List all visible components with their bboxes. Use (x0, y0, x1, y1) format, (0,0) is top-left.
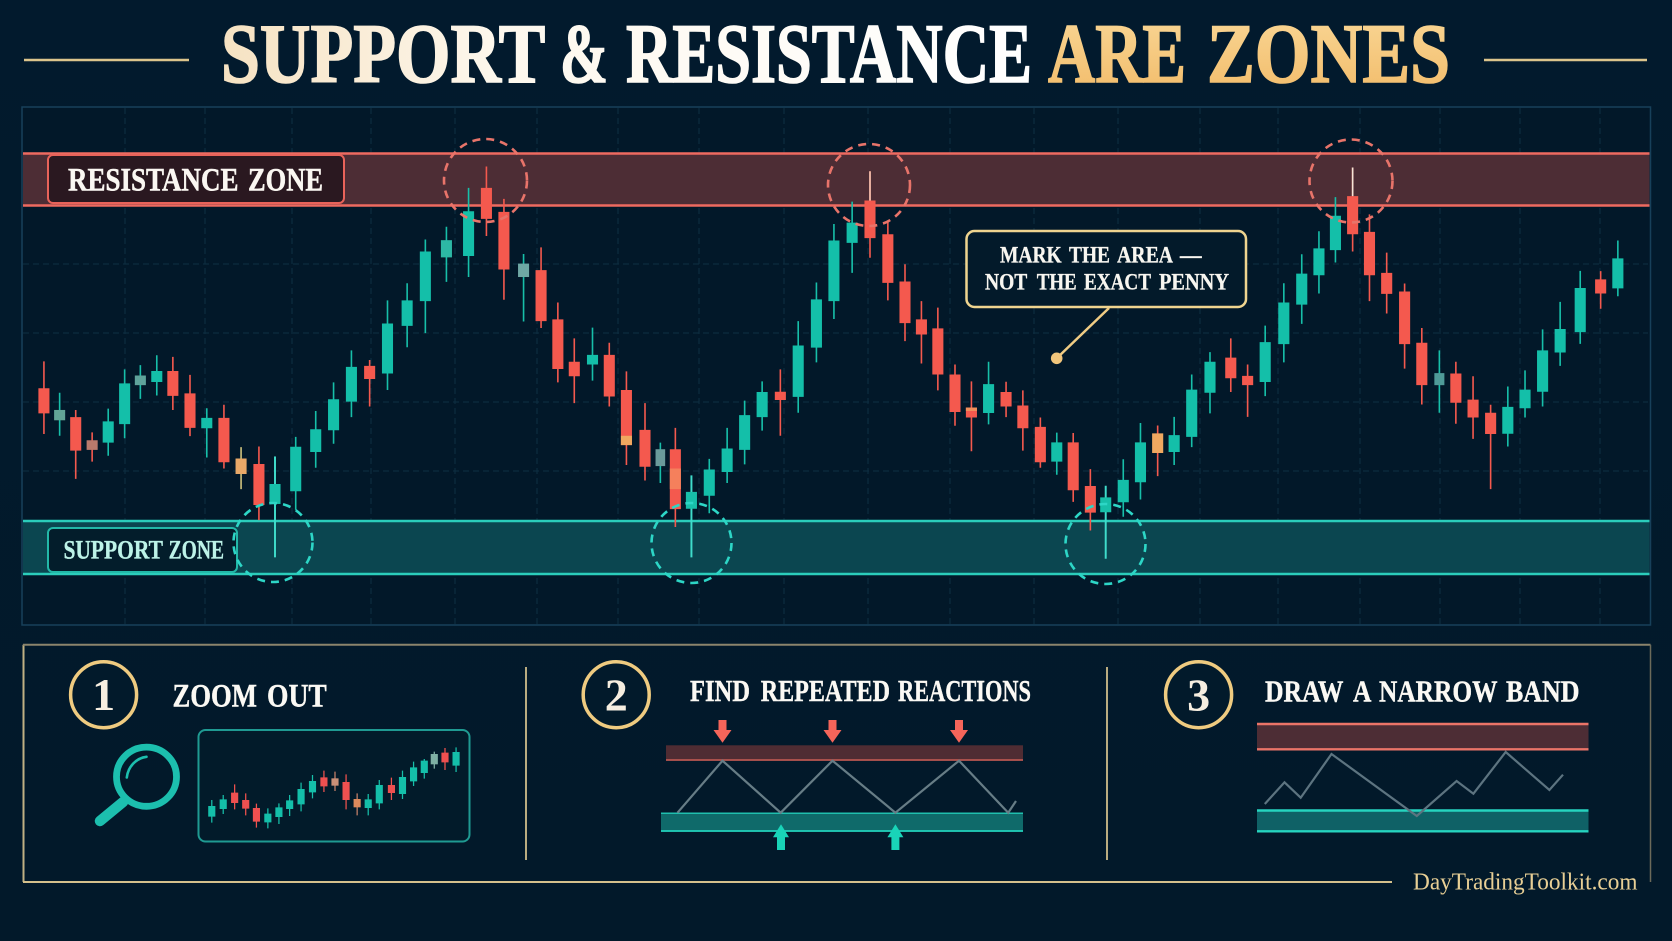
arrows: resistance rejections (714, 720, 968, 743)
support zone label: ZONE (169, 536, 224, 564)
callout: THE (1037, 270, 1077, 295)
resistance zone label (48, 155, 344, 203)
title: SUPPORT (221, 7, 545, 101)
step 1 number badge (71, 662, 137, 728)
resistance zone label: ZONE (248, 162, 323, 198)
support zone label (48, 528, 237, 572)
step 3 heading: NARROW (1379, 674, 1497, 708)
resistance mini band (666, 745, 1023, 761)
step 2 heading: REACTIONS (898, 673, 1031, 708)
callout: THE (1069, 242, 1110, 267)
support zone label: SUPPORT (64, 536, 163, 564)
step 3 number badge (1166, 662, 1232, 728)
title: ZONES (1207, 7, 1450, 101)
resistance zone band (23, 153, 1650, 206)
step 1 heading: OUT (267, 679, 327, 715)
step 1 heading: ZOOM (172, 679, 257, 715)
step 2 number badge: 2 (605, 670, 628, 721)
callout: EXACT (1084, 270, 1151, 295)
step 1 number badge: 1 (92, 669, 115, 720)
step 3 heading: A (1353, 674, 1372, 708)
step 2: find repeated reactions (583, 662, 1031, 850)
callout: AREA (1117, 242, 1173, 267)
resistance narrow band (1257, 724, 1588, 749)
title (24, 7, 1647, 101)
candlesticks: right section (1123, 168, 1618, 517)
candlesticks: middle section (558, 171, 1106, 559)
step 3 heading: DRAW (1265, 674, 1343, 708)
icon: magnifying glass (100, 747, 176, 821)
support zone band (23, 521, 1650, 574)
step 3 number badge: 3 (1187, 670, 1210, 721)
step 3: draw a narrow band (1166, 662, 1588, 832)
callout: NOT (985, 270, 1027, 295)
step 1: zoom out (71, 662, 469, 842)
step 2 heading: FIND (690, 673, 750, 708)
step 2 number badge (583, 662, 649, 728)
resistance touch circles (444, 139, 1392, 226)
arrows: support bounces (773, 824, 903, 850)
step 3 heading: BAND (1506, 674, 1580, 708)
support mini band (661, 813, 1023, 832)
support narrow band (1257, 810, 1588, 832)
title: ARE (1048, 7, 1186, 101)
resistance zone label: RESISTANCE (68, 162, 238, 198)
callout: MARK (1000, 242, 1062, 267)
watermark: DayTradingToolkit.com (1413, 869, 1638, 895)
mini candlestick chart (198, 730, 470, 842)
callout: — (1179, 242, 1203, 267)
step 2 heading: REPEATED (761, 673, 890, 708)
price path line (1265, 752, 1563, 816)
callout: PENNY (1159, 270, 1229, 295)
title: RESISTANCE (626, 7, 1032, 101)
support touch circles (234, 503, 1146, 584)
price zigzag line (678, 761, 1016, 813)
candlesticks: left section (44, 166, 541, 557)
panel: steps (23, 645, 1650, 882)
callout (966, 231, 1246, 364)
panel: price chart (22, 107, 1650, 625)
title: & (560, 7, 608, 101)
